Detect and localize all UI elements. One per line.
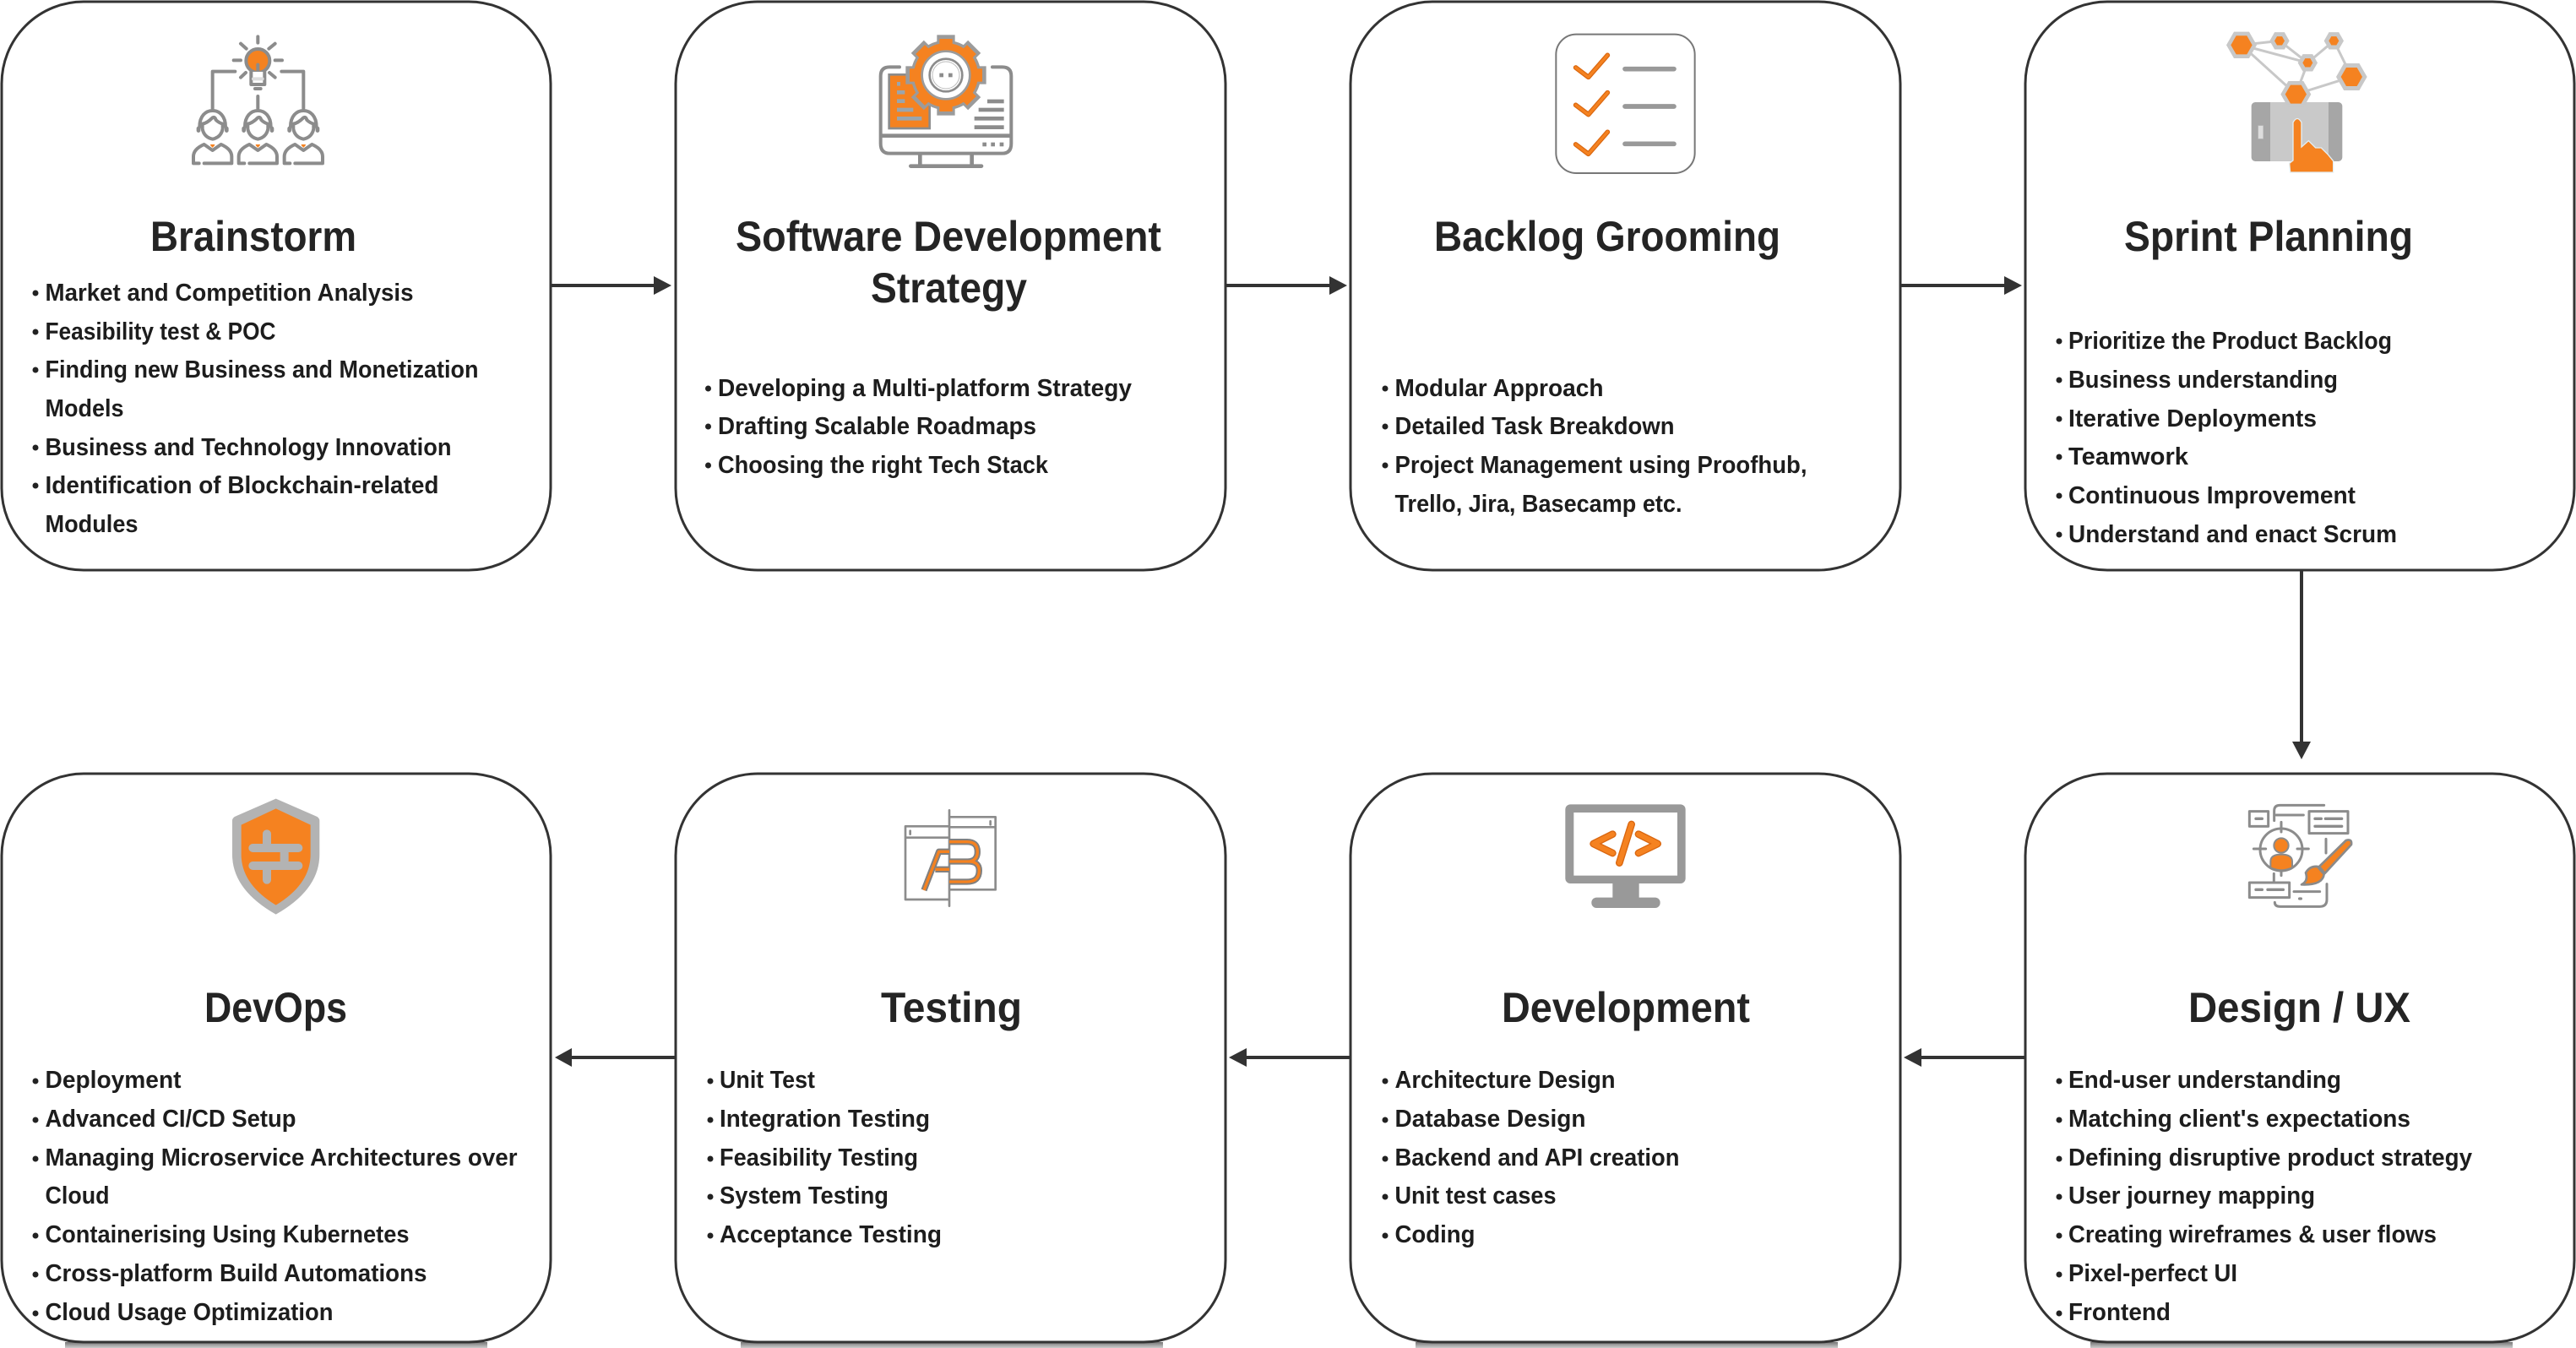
icon: user target, wireframes and paintbrush [2249,805,2351,906]
panel frame [2,774,551,1342]
bullet list: Feasibility test & POC [46,318,276,345]
panel: Software Development Strategy [676,2,1226,570]
heading: Backlog Grooming [1434,213,1780,260]
panel frame [676,774,1226,1342]
panel frame [1350,774,1900,1342]
bullet list: Containerising Using Kubernetes [46,1221,409,1248]
bullet list: Prioritize the Product Backlog [2068,328,2392,355]
bullet list: Integration Testing [720,1106,930,1133]
bullet list: Defining disruptive product strategy [2068,1144,2472,1171]
panel: Brainstorm [2,2,551,570]
bullet list: System Testing [720,1182,889,1209]
bullet list: Identification of Blockchain-related [46,472,439,499]
panel frame [1350,2,1900,570]
bullet list [1382,1067,1679,1248]
bullet list: Frontend [2068,1299,2171,1326]
bullet list: Models [46,395,123,422]
heading [736,213,1161,312]
bullet list: Continuous Improvement [2068,482,2356,509]
bullet list: Detailed Task Breakdown [1395,413,1674,440]
arrow: Backlog Grooming to Sprint Planning [1900,276,2022,295]
heading: DevOps [204,984,347,1031]
bullet list: User journey mapping [2068,1182,2315,1209]
bullet list: Unit Test [720,1067,815,1094]
heading: Design / UX [2188,984,2410,1031]
bullet list: Advanced CI/CD Setup [46,1106,296,1133]
bullet list: Modular Approach [1395,375,1603,402]
bullet list: Cloud Usage Optimization [46,1299,333,1326]
icon: tablet with network of hexagons and pointing hand [2226,32,2367,172]
panel: Testing [676,774,1226,1348]
bullet list: Unit test cases [1395,1182,1556,1209]
icon: shield [232,799,319,915]
panel frame [2025,774,2574,1342]
heading: Development [1502,984,1750,1031]
panel: Design / UX [2025,774,2574,1348]
panel: DevOps [2,774,551,1348]
bullet list: Coding [1395,1221,1475,1248]
bullet list [2056,1067,2472,1326]
bullet list: Managing Microservice Architectures over [46,1144,517,1171]
bullet list: Iterative Deployments [2068,405,2317,432]
bullet list [32,1067,517,1326]
bullet list [705,375,1132,479]
heading: Software Development [736,213,1161,260]
icon: monitor with code symbol [1565,804,1686,908]
bullet list: Drafting Scalable Roadmaps [718,413,1036,440]
icon: lightbulb and three people [193,36,323,163]
bullet list: Market and Competition Analysis [46,280,414,307]
panel frame [676,2,1226,570]
bullet list: Cross-platform Build Automations [46,1260,427,1287]
bullet list: Feasibility Testing [720,1144,918,1171]
bullet list: Creating wireframes & user flows [2068,1221,2437,1248]
bullet list: Matching client's expectations [2068,1106,2410,1133]
bullet list: Database Design [1395,1106,1586,1133]
panel frame [2,2,551,570]
bullet list: Choosing the right Tech Stack [718,452,1049,479]
panel: Backlog Grooming [1350,2,1900,570]
heading: Testing [881,984,1022,1031]
heading: Strategy [871,264,1027,312]
bullet list [708,1067,942,1248]
arrow: Sprint Planning to Design / UX [2292,570,2311,759]
bullet list: Developing a Multi-platform Strategy [718,375,1132,402]
heading: Brainstorm [150,213,356,260]
panel: Development [1350,774,1900,1348]
arrow: Testing to DevOps [555,1048,676,1067]
bullet list: Backend and API creation [1395,1144,1679,1171]
bullet list: End-user understanding [2068,1067,2341,1094]
bullet list: Acceptance Testing [720,1221,942,1248]
bullet list: Trello, Jira, Basecamp etc. [1395,491,1682,518]
bullet list [2056,328,2397,548]
bullet list: Business understanding [2068,367,2338,394]
bullet list: Modules [46,511,139,538]
arrow: Brainstorm to Software Development Strategy [551,276,671,295]
bullet list: Understand and enact Scrum [2068,521,2397,548]
bullet list: Deployment [46,1067,182,1094]
bullet list: Business and Technology Innovation [46,434,451,461]
icon: A/B test windows [905,810,996,906]
bullet list [32,280,478,538]
heading: Sprint Planning [2124,213,2413,260]
bullet list: Cloud [46,1182,110,1209]
panel: Sprint Planning [2025,2,2574,570]
bullet list: Finding new Business and Monetization [46,356,478,383]
icon: checklist [1556,35,1695,173]
bullet list: Teamwork [2068,443,2189,470]
panel frame [2025,2,2574,570]
arrow: Design / UX to Development [1904,1048,2025,1067]
bullet list: Architecture Design [1395,1067,1615,1094]
arrow: Software Development Strategy to Backlog Grooming [1226,276,1347,295]
bullet list: Project Management using Proofhub, [1395,452,1807,479]
arrow: Development to Testing [1229,1048,1350,1067]
bullet list: Pixel-perfect UI [2068,1260,2237,1287]
icon: monitor with gear and document [881,35,1011,166]
bullet list [1382,375,1807,518]
